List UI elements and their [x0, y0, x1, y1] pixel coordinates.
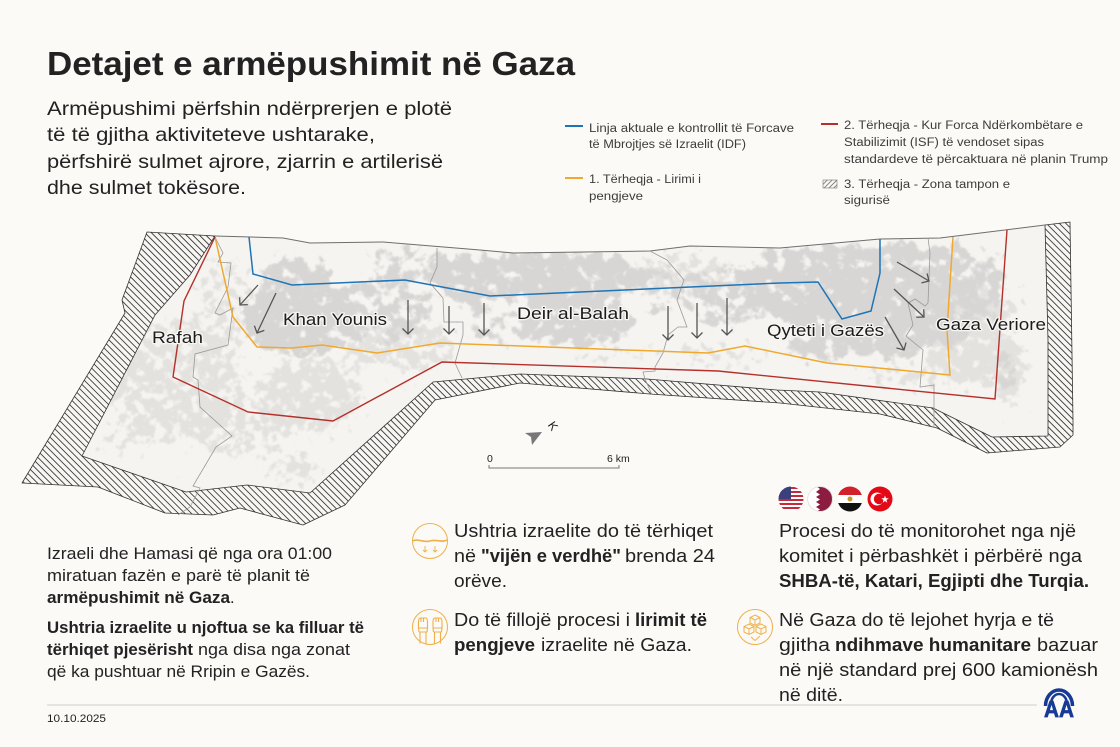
legend item: withdrawal 1: 1. Tërheqja - Lirimi i — [589, 174, 701, 186]
map label: North Gaza: Gaza Veriore — [936, 315, 1046, 334]
map label: Gaza City: Qyteti i Gazës — [767, 321, 884, 340]
map: withdrawal line 1 (yellow) — [215, 237, 953, 375]
map: north arrow: K — [545, 419, 561, 433]
text: hostage release: lirimit të — [635, 610, 707, 630]
map: scale bar — [487, 453, 630, 468]
map: scale bar: 6 km — [607, 453, 630, 465]
map label: Khan Younis: Khan Younis — [283, 310, 387, 329]
legend item: current IDF control line — [565, 123, 794, 151]
lower-left text block: tërhiqet pjesërisht — [47, 641, 194, 659]
intro text block: dhe sulmet tokësore. — [47, 177, 246, 199]
text: hostage release: izraelite në Gaza. — [541, 635, 692, 655]
text: hostage release: Do të fillojë procesi i — [454, 610, 630, 630]
lower-left text block: që ka pushtuar në Rripin e Gazës. — [47, 663, 310, 681]
flag: Turkey — [867, 486, 893, 512]
map label: Rafah: Rafah — [152, 328, 203, 347]
map: withdrawal line 2 (red) — [173, 230, 1007, 421]
legend item: withdrawal 2 — [821, 120, 1108, 166]
legend item: withdrawal 2: Stabilizimit (ISF) të vendoset sipas — [844, 137, 1044, 149]
flag: Egypt — [838, 486, 862, 512]
text: withdrawal to yellow line: në — [454, 546, 476, 566]
map: outer land edge — [215, 225, 1045, 253]
text: monitoring committee: komitet i përbashkët i përbërë nga — [779, 546, 1083, 566]
intro text block — [47, 98, 452, 199]
title: Detajet e armëpushimit në Gaza — [47, 45, 576, 82]
map: withdrawal arrows — [240, 262, 929, 350]
map: buffer zone hatching — [22, 222, 1073, 525]
lower-left text block: . — [230, 589, 235, 607]
map: scale bar: 0 — [487, 453, 493, 465]
text: humanitarian aid: gjitha — [779, 635, 831, 655]
lower-left text block: Ushtria izraelite u njoftua se ka filluar të — [47, 619, 364, 637]
country flags — [778, 486, 893, 512]
legend item: withdrawal 2: standardeve të përcaktuara në planin Trump — [844, 154, 1108, 166]
text: monitoring committee: Procesi do të monitorohet nga një — [779, 521, 1076, 541]
lower-left text block: nga disa nga zonat — [198, 641, 350, 659]
text: withdrawal to yellow line: Ushtria izraelite do të tërhiqet — [454, 521, 713, 541]
text: hostage release: pengjeve — [454, 635, 535, 655]
flag: USA — [778, 486, 804, 509]
legend item: withdrawal 3 buffer zone: sigurisë — [844, 195, 890, 207]
text: withdrawal to yellow line: orëve. — [454, 571, 507, 591]
text: monitoring committee — [779, 521, 1089, 591]
legend item: withdrawal 2: 2. Tërheqja - Kur Forca Ndërkombëtare e — [844, 120, 1083, 132]
legend item: withdrawal 3 buffer zone: 3. Tërheqja - Zona tampon e — [844, 179, 1010, 191]
text: humanitarian aid: në një standard prej 600 kamionësh — [779, 660, 1098, 680]
logo: Anadolu Agency: AA — [1044, 696, 1074, 722]
text: humanitarian aid: ndihmave humanitare — [835, 635, 1031, 655]
legend item: current IDF control line: Linja aktuale e kontrollit të Forcave — [589, 123, 794, 135]
text: withdrawal to yellow line: "vijën e verdhë" — [481, 546, 621, 566]
text: humanitarian aid: bazuar — [1037, 635, 1098, 655]
intro text block: të të gjitha aktiviteteve ushtarake, — [47, 124, 375, 146]
text: withdrawal to yellow line: brenda 24 — [625, 546, 715, 566]
map of Gaza — [22, 222, 1073, 525]
text: hostage release — [454, 610, 707, 655]
date: 10.10.2025 — [47, 713, 106, 725]
legend — [565, 120, 1108, 207]
text: humanitarian aid: Në Gaza do të lejohet hyrja e të — [779, 610, 1054, 630]
legend item: withdrawal 1 — [565, 174, 701, 203]
map: north arrow — [525, 419, 561, 445]
icon: yellow line withdrawal — [412, 524, 448, 558]
lower-left text block — [47, 545, 364, 681]
legend item: withdrawal 3 buffer zone — [823, 179, 1010, 207]
icon: hostages raised hands — [412, 610, 448, 644]
map: built-up areas — [95, 237, 1026, 488]
legend item: withdrawal 1: pengjeve — [589, 191, 643, 203]
icon: humanitarian aid boxes — [738, 610, 772, 644]
map label: Deir al-Balah: Deir al-Balah — [517, 304, 629, 323]
intro text block: përfshirë sulmet ajrore, zjarrin e artilerisë — [47, 151, 443, 173]
text: withdrawal to yellow line — [454, 521, 715, 591]
lower-left text block: miratuan fazën e parë të planit të — [47, 567, 310, 585]
text: monitoring committee: SHBA-të, Katari, Egjipti dhe Turqia. — [779, 571, 1089, 591]
text: humanitarian aid: në ditë. — [779, 685, 843, 705]
legend item: current IDF control line: të Mbrojtjes së Izraelit (IDF) — [589, 139, 746, 151]
lower-left text block: armëpushimit në Gaza — [47, 589, 231, 607]
lower-left text block: Izraeli dhe Hamasi që nga ora 01:00 — [47, 545, 332, 563]
text: humanitarian aid — [779, 610, 1098, 705]
intro text block: Armëpushimi përfshin ndërprerjen e plotë — [47, 98, 452, 120]
flag: Qatar — [807, 486, 833, 512]
map: current IDF control line (blue) — [249, 237, 880, 319]
map: governorate boundaries — [178, 237, 934, 515]
map: land area — [82, 225, 1048, 493]
